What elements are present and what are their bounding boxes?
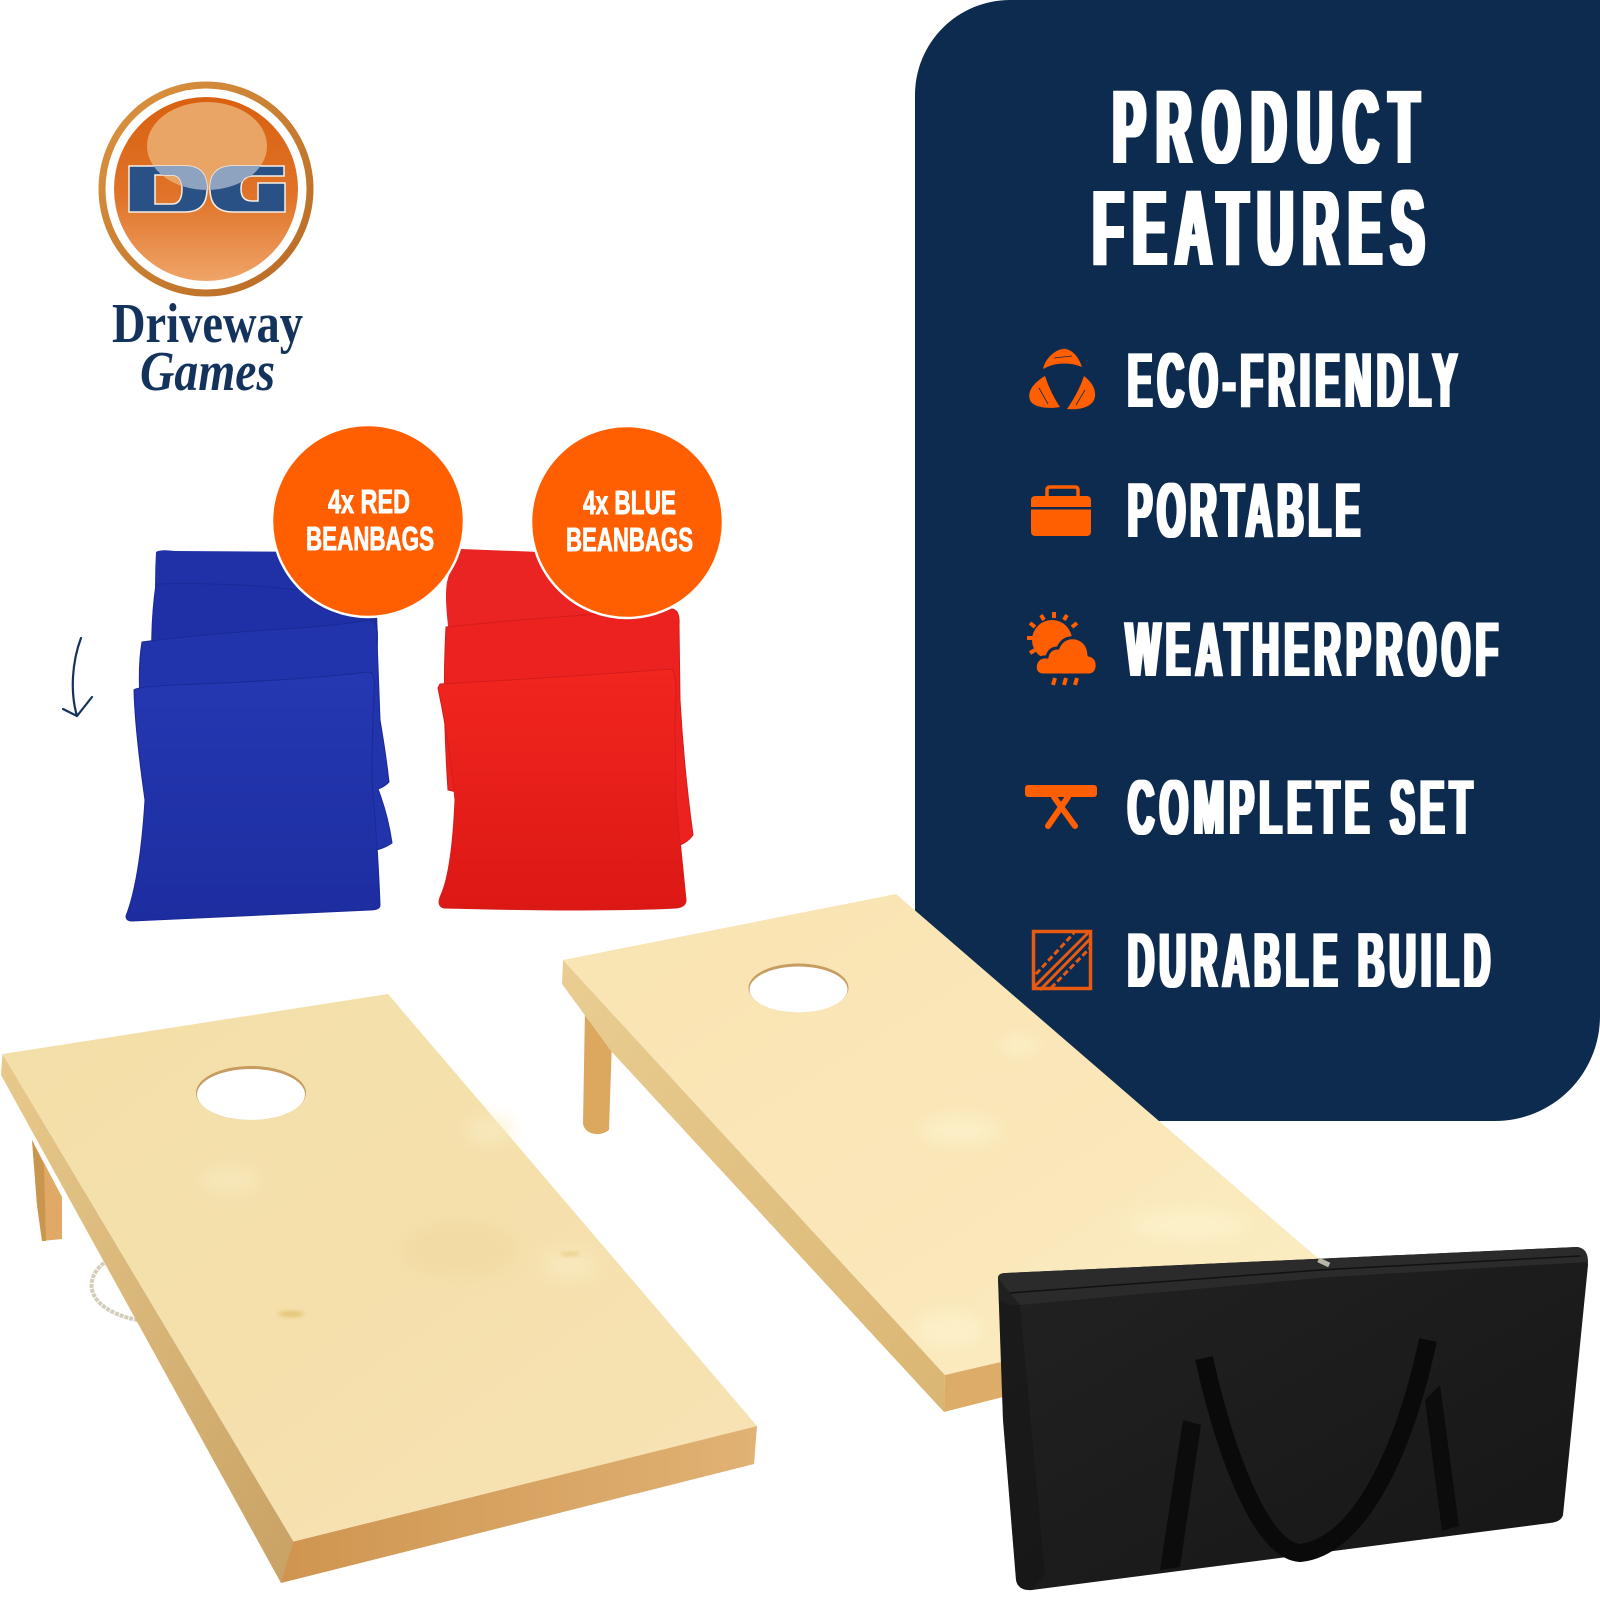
handle fixing strips (1160, 1420, 1201, 1570)
logo: driveway games (102, 85, 310, 403)
board leg (32, 1140, 62, 1241)
board hole (196, 1066, 306, 1120)
icon: folding table (1025, 785, 1097, 826)
carry bag (998, 1247, 1588, 1590)
board top surface (563, 894, 1320, 1375)
icon: recycling leaves (1029, 349, 1095, 409)
label: eco-friendly: ECO-FRIENDLY (1128, 337, 1457, 424)
feature: weatherproof (1027, 606, 1498, 693)
badge: 4x red beanbags (272, 425, 464, 617)
logo wordmark: Games (140, 341, 275, 403)
label: weatherproof: WEATHERPROOF (1126, 606, 1498, 693)
heading: product features: PRODUCT (1113, 69, 1419, 186)
heading: product features: FEATURES (1093, 167, 1424, 288)
badge: 4x blue beanbags: BEANBAGS (566, 521, 693, 558)
cornhole board: front left (1, 994, 757, 1583)
board side rail (562, 960, 945, 1412)
label: durable build: DURABLE BUILD (1128, 917, 1490, 1004)
arrow: pointing to beanbags (63, 638, 92, 716)
label: complete set: COMPLETE SET (1128, 764, 1472, 851)
board front rail (944, 1360, 1003, 1412)
badge: 4x blue beanbags (531, 426, 723, 618)
board front rail (281, 1426, 757, 1583)
board side rail (1, 1054, 294, 1583)
feature: durable build (1034, 917, 1490, 1004)
bag body (998, 1247, 1588, 1590)
badge: 4x red beanbags: BEANBAGS (306, 520, 434, 557)
feature: portable (1031, 467, 1360, 554)
cornhole board: back right (562, 894, 1320, 1412)
carry handle (1204, 1340, 1428, 1553)
panel: product features background (915, 0, 1600, 1121)
feature: complete set (1025, 764, 1472, 851)
board leg (583, 1008, 612, 1134)
feature: eco-friendly (1029, 337, 1457, 424)
zipper pull (1317, 1258, 1330, 1267)
blue beanbags (126, 550, 392, 921)
left gusset shading (998, 1278, 1045, 1590)
wood tone marks (200, 1116, 598, 1280)
icon: stitched board (1034, 932, 1091, 990)
heading: product features (1093, 69, 1424, 288)
logo wordmark: Driveway (112, 293, 303, 355)
icon: carry case (1031, 487, 1091, 536)
board top surface (2, 994, 757, 1542)
zip gusset (998, 1247, 1588, 1305)
wood highlights (915, 1035, 1250, 1348)
icon: sun and rain cloud (1027, 612, 1097, 685)
red beanbags (438, 549, 693, 910)
logo wordmark (112, 293, 303, 403)
label: portable: PORTABLE (1128, 467, 1360, 554)
rope handle (92, 1263, 137, 1320)
logo badge (102, 85, 310, 293)
badge: 4x blue beanbags: 4x BLUE (583, 484, 676, 521)
badge: 4x red beanbags: 4x RED (328, 483, 410, 520)
board hole (748, 964, 848, 1012)
